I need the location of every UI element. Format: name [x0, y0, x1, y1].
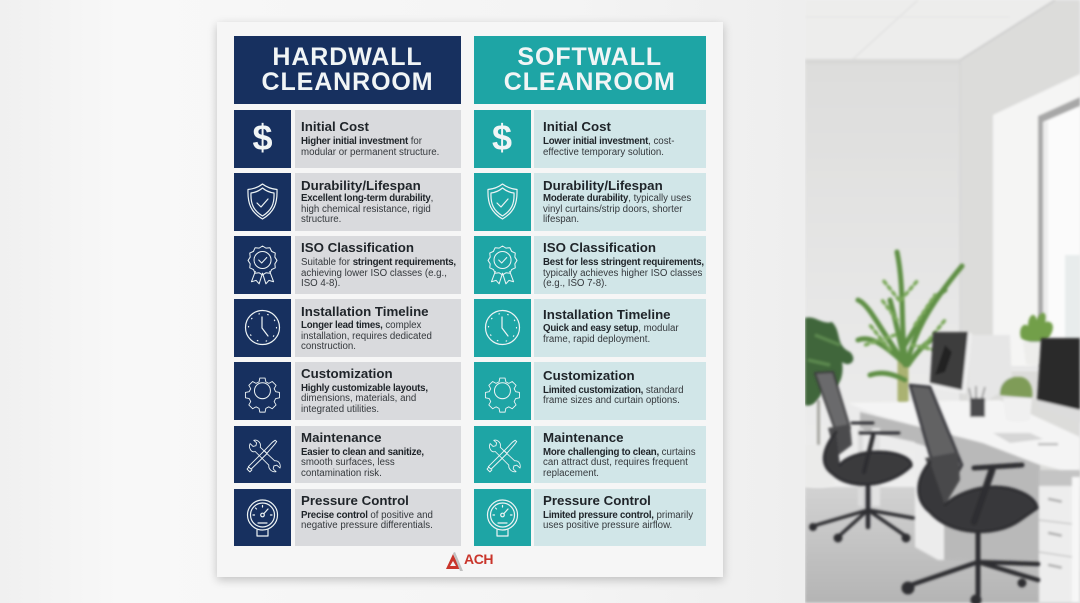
- row description: frame sizes and curtain options.: [543, 395, 680, 406]
- panel: softwall installation timeline: [474, 299, 706, 357]
- panel: softwall durability: [474, 173, 706, 231]
- panel: hardwall iso classification: [234, 236, 461, 294]
- row title: Customization: [543, 368, 635, 383]
- row description: Highly customizable layouts,: [301, 382, 428, 394]
- icon: clock: [234, 299, 291, 356]
- row description: construction.: [301, 341, 356, 352]
- row description: [301, 510, 433, 531]
- row description: [301, 446, 424, 478]
- row description: ISO 4-8).: [301, 278, 340, 289]
- row description: vinyl curtains/strip doors, shorter: [543, 204, 682, 214]
- row description: [543, 384, 684, 406]
- logo: ACH: [446, 551, 493, 571]
- icon: dollar sign: [474, 110, 530, 168]
- drawers: [1039, 486, 1080, 603]
- heading: softwall cleanroom: [474, 36, 706, 104]
- row description: smooth surfaces, less: [301, 457, 395, 468]
- row description: frame, rapid deployment.: [543, 334, 650, 344]
- row description: [543, 323, 679, 344]
- panel: softwall pressure control: [474, 489, 706, 546]
- icon: pressure gauge: [234, 488, 291, 546]
- row description: [543, 257, 704, 289]
- row title: Customization: [301, 366, 393, 381]
- row description: [543, 446, 696, 478]
- panel: hardwall initial cost: [234, 110, 461, 168]
- row title: ISO Classification: [543, 240, 656, 255]
- panel: hardwall maintenance: [234, 426, 461, 483]
- heading: softwall cleanroom: CLEANROOM: [504, 68, 676, 96]
- row description: [543, 136, 674, 158]
- row title: Initial Cost: [543, 119, 611, 134]
- row title: Durability/Lifespan: [301, 178, 421, 193]
- row description: lifespan.: [543, 214, 579, 225]
- row description: [301, 193, 433, 225]
- chair 1: [810, 372, 913, 542]
- row description: replacement.: [543, 468, 599, 478]
- icon: award ribbon: [234, 236, 291, 294]
- window sill plant: [1003, 313, 1053, 371]
- row description: installation, requires dedicated: [301, 330, 432, 342]
- panel: hardwall customization: [234, 362, 461, 420]
- icon: dollar sign: [234, 110, 291, 168]
- row title: Installation Timeline: [301, 304, 429, 319]
- row description: typically achieves higher ISO classes: [543, 268, 702, 278]
- icon: dollar sign: $: [492, 117, 512, 158]
- poster: [217, 22, 723, 577]
- row description: integrated utilities.: [301, 404, 379, 414]
- icon: shield: [474, 173, 530, 230]
- office scene photo: [805, 0, 1080, 603]
- row title: Maintenance: [301, 430, 382, 445]
- panel: softwall maintenance: [474, 426, 706, 483]
- row title: Durability/Lifespan: [543, 178, 663, 193]
- heading: softwall cleanroom: SOFTWALL: [517, 42, 662, 70]
- row description: achieving lower ISO classes (e.g.,: [301, 268, 447, 278]
- icon: pressure gauge: [474, 488, 530, 546]
- row description: Suitable for stringent requirements,: [301, 257, 456, 268]
- row description: [301, 320, 432, 352]
- row description: contamination risk.: [301, 468, 382, 478]
- row description: negative pressure differentials.: [301, 520, 433, 531]
- icon: wrench and screwdriver: [234, 426, 291, 483]
- row description: Lower initial investment, cost-: [543, 136, 674, 147]
- row description: (e.g., ISO 7-8).: [543, 278, 607, 289]
- heading: hardwall cleanroom: CLEANROOM: [262, 68, 433, 96]
- icon: gear: [234, 362, 291, 420]
- row title: Installation Timeline: [543, 307, 671, 322]
- icon: shield: [234, 173, 291, 230]
- left plant: [805, 317, 853, 488]
- desk cabinet: [915, 443, 944, 560]
- icon: award ribbon: [474, 236, 530, 294]
- row description: can attract dust, requires frequent: [543, 457, 688, 468]
- icon: logo triangle: [446, 552, 463, 571]
- row description: Limited pressure control, primarily: [543, 510, 693, 520]
- panel: hardwall pressure control: [234, 489, 461, 546]
- panel: softwall iso classification: [474, 236, 706, 294]
- row title: Initial Cost: [301, 119, 369, 134]
- row description: [301, 136, 439, 158]
- background wall: [0, 0, 805, 603]
- under-desk back panel: [860, 412, 1040, 562]
- panel: softwall initial cost: [474, 110, 706, 168]
- row description: [301, 382, 428, 414]
- row description: [301, 257, 456, 289]
- row description: [543, 193, 691, 225]
- icon: clock: [474, 299, 530, 356]
- large plant: [858, 252, 962, 400]
- row description: uses positive pressure airflow.: [543, 520, 672, 531]
- row description: Limited customization, standard: [543, 384, 684, 396]
- row description: Easier to clean and sanitize,: [301, 446, 424, 458]
- icon: wrench and screwdriver: [474, 426, 530, 483]
- row description: modular or permanent structure.: [301, 147, 439, 158]
- monitors: [968, 335, 1012, 402]
- row title: Pressure Control: [301, 493, 409, 508]
- row description: high chemical resistance, rigid: [301, 204, 431, 214]
- panel: softwall customization: [474, 362, 706, 420]
- chair 2: [902, 385, 1038, 603]
- icon: gear: [474, 362, 530, 420]
- desk: [848, 400, 1080, 475]
- logo wordmark: ACH: [464, 551, 493, 567]
- row description: Longer lead times, complex: [301, 320, 421, 331]
- row title: Pressure Control: [543, 493, 651, 508]
- panel: hardwall durability: [234, 173, 461, 231]
- row description: More challenging to clean, curtains: [543, 446, 696, 458]
- row description: Excellent long-term durability,: [301, 193, 433, 204]
- row title: Maintenance: [543, 430, 624, 445]
- row description: Best for less stringent requirements,: [543, 257, 704, 268]
- row description: Moderate durability, typically uses: [543, 193, 691, 204]
- row description: Higher initial investment for: [301, 136, 422, 147]
- panel: hardwall installation timeline: [234, 299, 461, 357]
- row description: [543, 510, 693, 531]
- row description: Precise control of positive and: [301, 510, 433, 520]
- row description: effective temporary solution.: [543, 147, 664, 158]
- row title: ISO Classification: [301, 240, 414, 255]
- heading: hardwall cleanroom: HARDWALL: [272, 42, 423, 70]
- row description: dimensions, materials, and: [301, 393, 416, 404]
- heading: hardwall cleanroom: [234, 36, 461, 104]
- row description: structure.: [301, 214, 341, 225]
- icon: dollar sign: $: [252, 117, 273, 158]
- row description: Quick and easy setup, modular: [543, 323, 679, 334]
